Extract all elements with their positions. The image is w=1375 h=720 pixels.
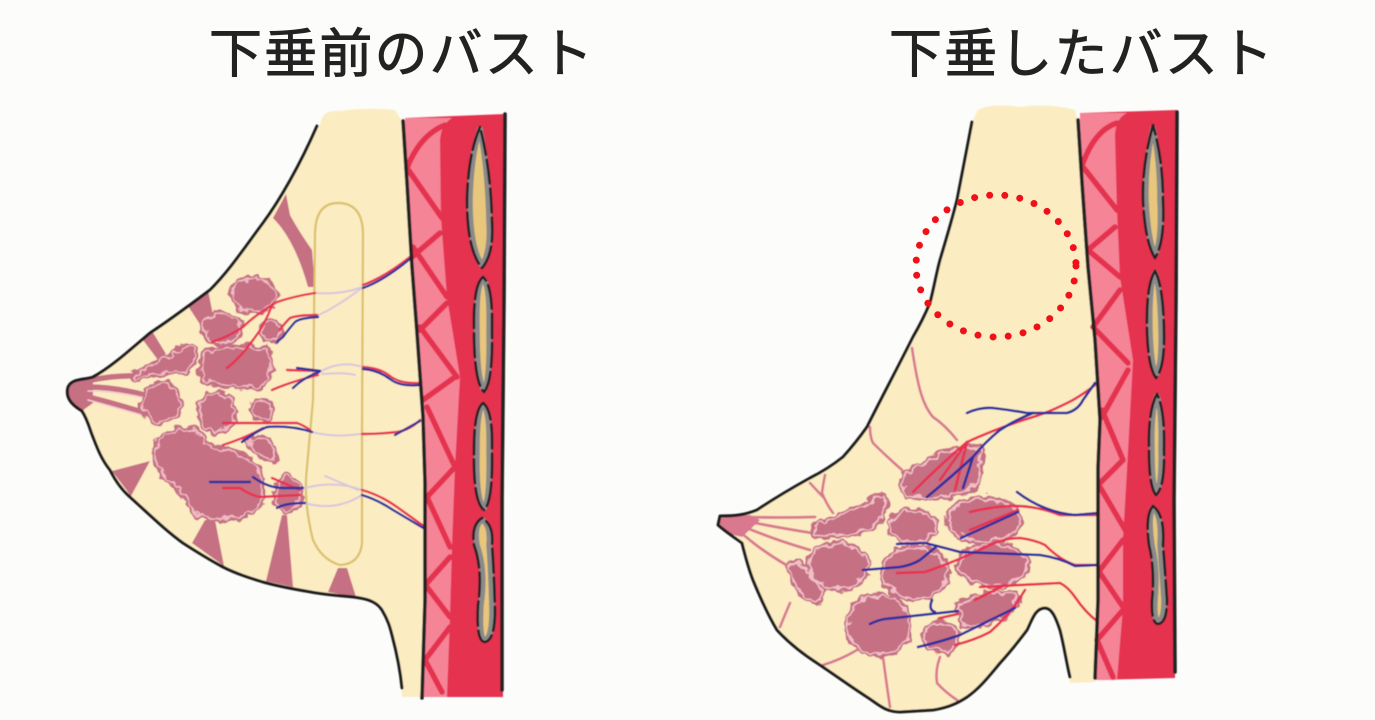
skin outline <box>67 126 402 688</box>
nipple <box>67 377 93 411</box>
veins <box>863 383 1098 647</box>
chest muscle <box>1080 110 1177 680</box>
ducts <box>88 376 145 416</box>
implant outline <box>306 203 363 565</box>
arteries <box>897 385 1098 645</box>
skin outline <box>718 122 1070 712</box>
ribs <box>1146 128 1164 621</box>
arteries <box>212 256 425 527</box>
nipple and ducts <box>718 515 760 537</box>
ligaments <box>112 194 356 597</box>
breast tissue <box>67 109 425 697</box>
rib outlines <box>467 127 495 642</box>
pale vessels inside implant <box>305 287 363 506</box>
lobules <box>790 447 1027 654</box>
rib outlines <box>1143 125 1167 624</box>
callout: red dotted circle <box>916 195 1076 337</box>
panel: breast before sagging <box>67 109 505 698</box>
title: after sagging: 下垂したバスト <box>889 25 1273 84</box>
chest muscle <box>405 114 505 697</box>
ribs <box>470 129 492 640</box>
panel: breast after sagging <box>718 106 1177 712</box>
ligaments <box>780 348 957 707</box>
veins <box>210 258 425 529</box>
chest wall lines <box>1078 112 1177 678</box>
lobules <box>135 279 300 518</box>
title: before sagging: 下垂前のバスト <box>209 25 593 84</box>
breast tissue <box>718 106 1100 712</box>
chest wall lines <box>403 114 505 698</box>
